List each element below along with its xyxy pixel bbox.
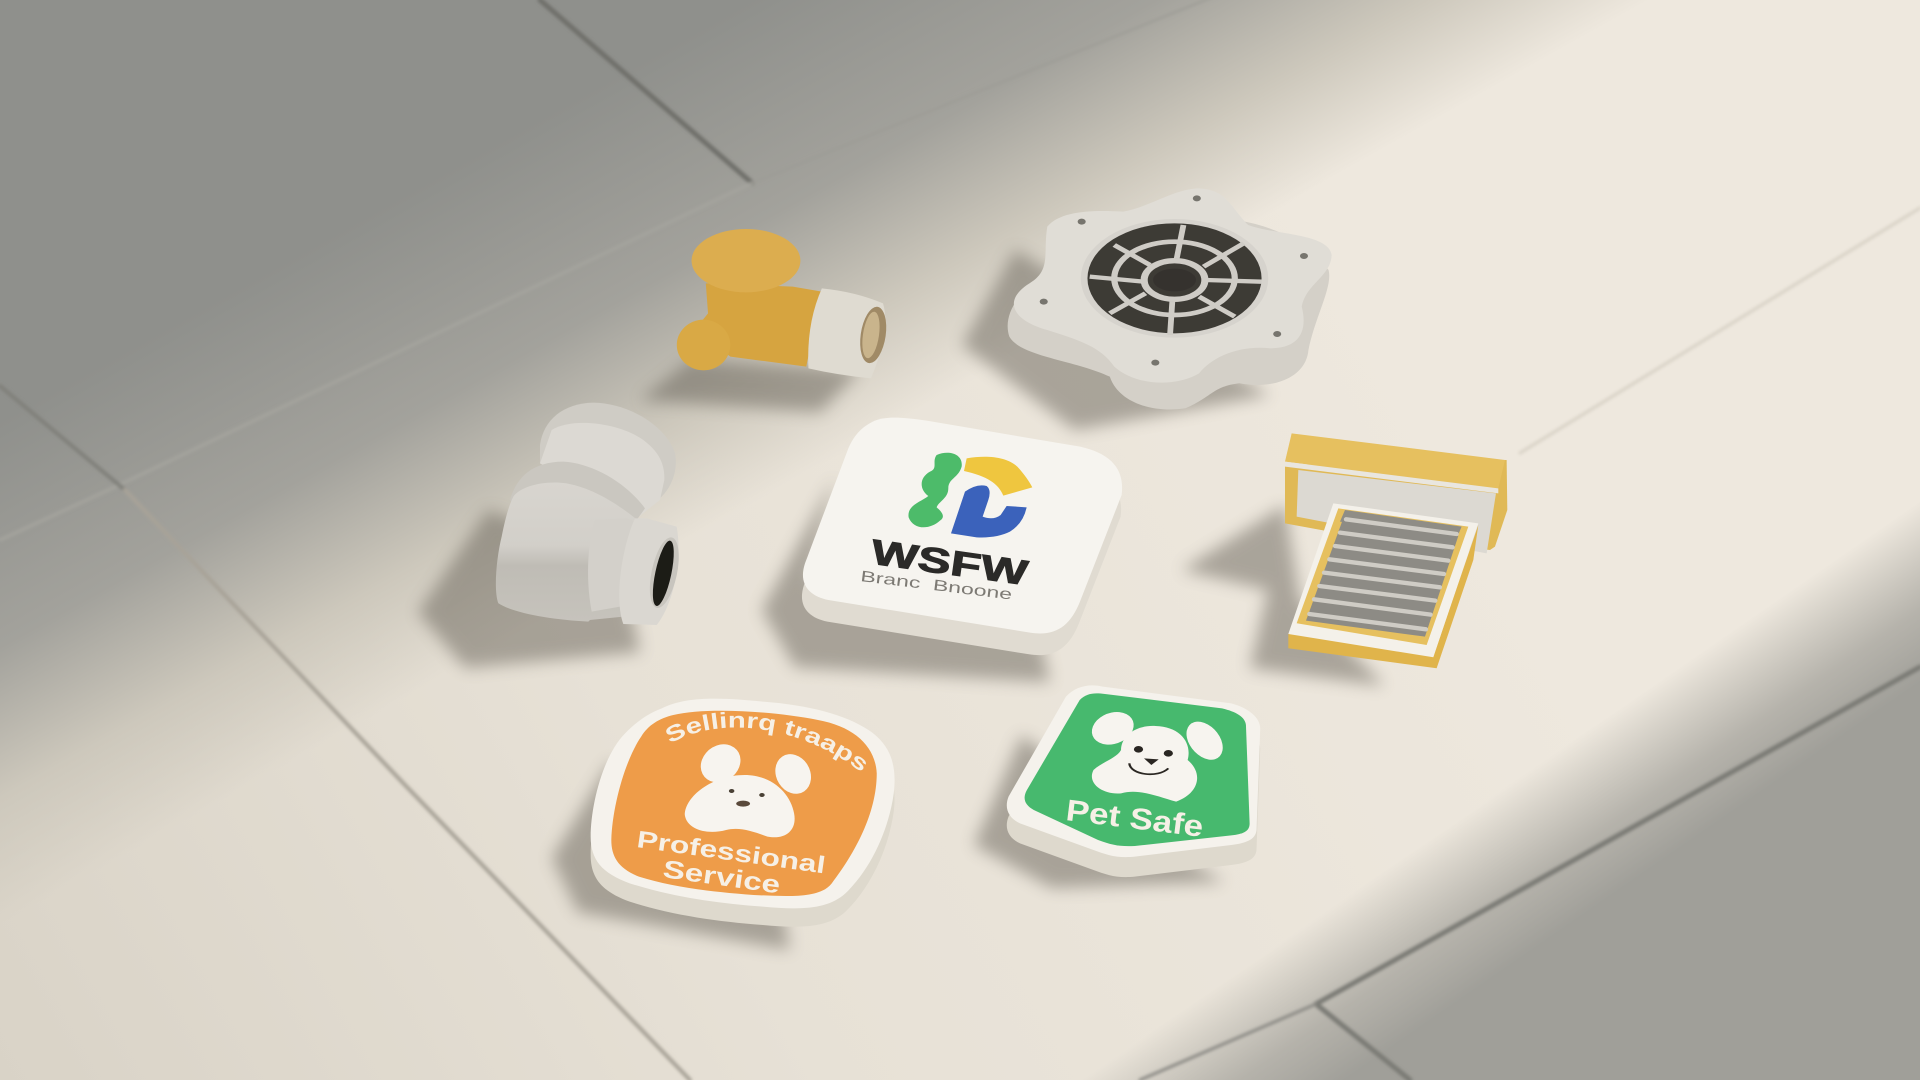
badge text: professional: Professional	[635, 826, 827, 879]
icon: yellow vent with slatted tray	[1285, 433, 1507, 668]
icon: grey elbow pipe	[496, 403, 684, 625]
logo mark: green wave	[908, 453, 962, 527]
logo mark: blue D	[951, 485, 1027, 537]
badge text: arc: Sellinrq traaps	[666, 712, 866, 770]
badge text: service: Service	[661, 855, 782, 899]
brand tagline: Branc Bnoone	[860, 568, 1013, 604]
dog mascot	[685, 741, 815, 837]
logo mark: yellow arc	[964, 457, 1032, 496]
icon: round floor drain	[1008, 188, 1332, 410]
badge text: pet safe: Pet Safe	[1064, 794, 1205, 844]
cast shadows	[418, 250, 1385, 950]
brand name: WSFW	[869, 533, 1030, 593]
dog mascot	[1083, 706, 1230, 802]
badge: green pet safe	[1007, 685, 1260, 877]
logo badge: WSFW	[802, 418, 1122, 655]
icon: yellow valve tap	[677, 229, 890, 378]
badge: orange professional service	[590, 698, 894, 926]
